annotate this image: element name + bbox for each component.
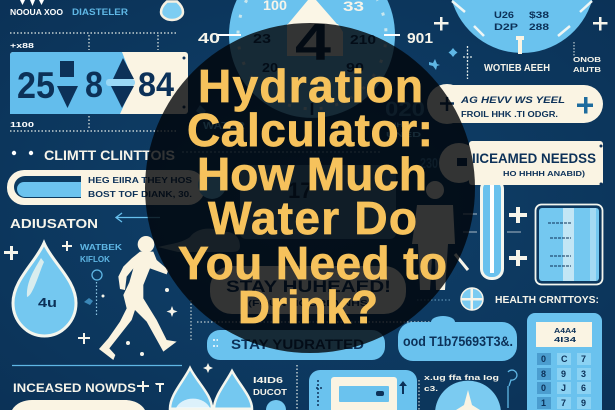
centre gauge: 20: [262, 60, 278, 75]
stay hydrated pill: STAY YUDRATTED: [231, 337, 364, 352]
icon: small water drop: [161, 2, 183, 20]
title: You Need to: [178, 237, 447, 289]
centre gauge: 40: [198, 30, 220, 47]
calculator right: C: [561, 354, 568, 364]
dotted vertical: [296, 365, 298, 410]
plus signs top right: [434, 17, 608, 30]
water intake label: WATBEK: [80, 243, 122, 252]
health conditions heading: HEALTH CRNTTOYS:: [495, 295, 599, 306]
title: Drink?: [238, 281, 378, 333]
caption and blue dial bottom: [419, 370, 517, 410]
calculator right: 7: [561, 398, 566, 408]
increased needs panel: HO HHHH ANABID): [503, 169, 586, 178]
calculator panel bottom centre: [309, 370, 417, 410]
number panel: 1100: [10, 120, 34, 129]
calculator right: 8: [541, 369, 546, 379]
faint water label behind title: 020: [385, 98, 425, 121]
centre gauge: 901: [407, 30, 433, 47]
top right dial: 288: [529, 22, 549, 32]
faint water label behind title: HHO: [390, 122, 410, 129]
calculator right: [527, 313, 602, 410]
faint water label behind title: [196, 98, 438, 172]
calculator right: 9: [561, 369, 566, 379]
centre gauge: [198, 0, 433, 118]
dark circle overlay: [145, 23, 475, 353]
calculator right: 6: [581, 383, 586, 393]
calculator right: J: [561, 383, 566, 393]
top right dial: $38: [529, 10, 549, 20]
caption and blue dial bottom: c3.: [424, 386, 438, 393]
increased needs panel: [439, 141, 603, 186]
water intake label: [80, 243, 122, 315]
header labels top left: DIASTELER: [72, 7, 128, 18]
icon: walking runner: [99, 236, 177, 360]
dotted arrow behind title: [182, 151, 380, 153]
top right dial: U26: [494, 10, 514, 20]
arrow left: [116, 213, 160, 222]
centre gauge: 23: [253, 31, 271, 46]
title: How Much: [197, 148, 427, 200]
water intake label: KIFLOK: [80, 255, 110, 264]
water label top right: WOTIEB AEEH: [484, 63, 550, 74]
title: Water Do: [208, 192, 417, 244]
calculator right: 7: [581, 354, 586, 364]
icon: large water drop: 4u: [38, 295, 57, 310]
number panel: [10, 41, 188, 129]
water label top right: ONOB: [573, 57, 601, 64]
title: Calculator:: [187, 104, 433, 156]
dotted guides: [10, 33, 178, 131]
bottom label: [253, 375, 288, 410]
heading: increased needs bottom: INCEASED NOWDS: [13, 381, 136, 395]
calculator right: 4I34: [554, 335, 577, 344]
climate pill: HEG EIIRA THEY HOS: [88, 175, 192, 185]
health conditions heading: [417, 288, 599, 310]
cream pill behind title: [210, 266, 406, 314]
hydration tip pill: AG HEVV WS YEEL: [460, 95, 565, 106]
top right dial: [452, 0, 592, 54]
hydration tip pill: FROIL HHK .TI ODGR.: [461, 110, 558, 119]
number panel: +x88: [10, 41, 34, 50]
title: Hydration: [198, 60, 423, 112]
heading: adjustment: ADIUSATON: [10, 216, 98, 231]
title: [178, 60, 447, 333]
centre gauge: 210: [350, 32, 376, 47]
faint water label behind title: UNED: [386, 132, 421, 139]
icon: large water drop: [13, 243, 76, 336]
calculator right: 0: [541, 383, 546, 393]
number panel: 25: [17, 65, 55, 106]
caption and blue dial bottom: x.ug ffa fna Iog: [424, 375, 499, 382]
bottom label: I4ID6: [253, 375, 283, 385]
divider line: [12, 364, 182, 366]
person silhouette behind title: [412, 181, 455, 290]
climate pill: [7, 170, 205, 205]
plus signs right: [509, 207, 527, 266]
top right dial: D2P: [494, 22, 518, 32]
bottom left pill: [12, 400, 145, 410]
decorative plus signs left: [4, 241, 178, 356]
stay hydrated pill: [207, 330, 385, 360]
bottom label: DUCOT: [253, 387, 288, 397]
faint water label behind title: WATER: [203, 121, 246, 132]
thermometer: [463, 178, 521, 280]
water label top right: AIUTB: [573, 67, 601, 74]
increased needs panel: IICEAMED NEEDSS: [472, 151, 596, 166]
faint water label behind title: 230: [420, 155, 438, 172]
cloud behind title: [158, 229, 240, 252]
calculator right: 3: [581, 369, 586, 379]
number panel: 8: [85, 64, 103, 105]
number cloud: [398, 316, 517, 361]
calculator right: A4A4: [554, 326, 577, 335]
dotted divider centre: [191, 300, 450, 340]
icon: pair of water drops: [170, 368, 252, 409]
cream pill behind title: STAY HUHEAED!: [226, 277, 391, 296]
hydration tip pill: [427, 84, 603, 124]
calculator right: 1: [541, 398, 546, 408]
centre gauge: 4: [295, 14, 331, 72]
heading: climate conditions: CLIMTT CLINTTOIS: [44, 147, 175, 163]
calculator right: 0: [541, 354, 546, 364]
water label top right: [429, 42, 601, 79]
chart panel: [536, 204, 602, 284]
central blue board behind title: [198, 165, 396, 239]
central blue board behind title: 17: [288, 178, 312, 203]
calculator right: 9: [581, 398, 586, 408]
centre gauge: 90: [346, 60, 364, 75]
cream pill behind title: (FOUN HOORD) NHS: [248, 298, 368, 308]
number panel: 84: [138, 66, 174, 104]
small sparkle: [203, 363, 213, 373]
header labels top left: [10, 0, 128, 18]
header labels top left: NOOUA XOO: [10, 7, 63, 17]
number cloud: ood T1b75693T3&.: [403, 333, 513, 349]
climate pill: BOST TOF DIANK, 30.: [88, 189, 192, 199]
small tool icon right of title: [455, 254, 468, 270]
